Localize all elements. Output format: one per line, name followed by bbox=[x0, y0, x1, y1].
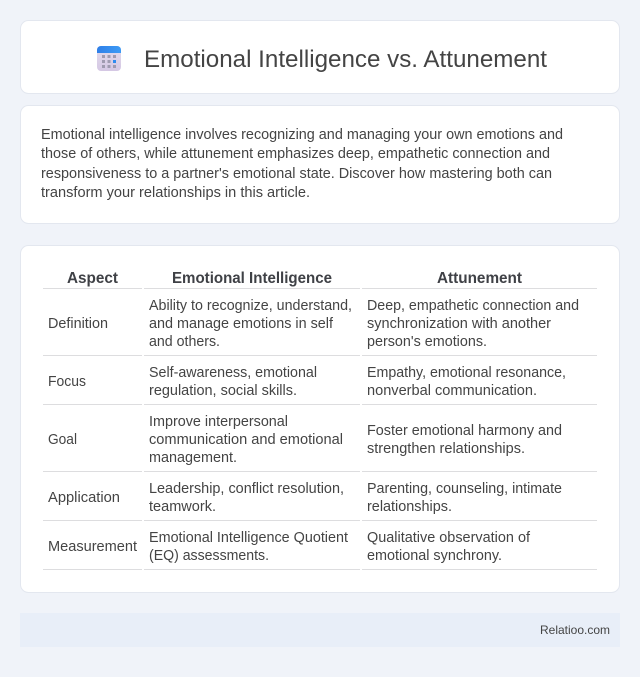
row: goal: management. bbox=[149, 450, 237, 466]
row: goal: Improve interpersonal bbox=[149, 414, 288, 430]
table header row bbox=[67, 270, 522, 287]
row: measurement: emotional synchrony. bbox=[367, 548, 502, 564]
row: definition: and manage emotions in self bbox=[149, 316, 334, 332]
row: focus: Focus bbox=[48, 374, 86, 390]
row: definition: person's emotions. bbox=[367, 334, 487, 350]
row: application: relationships. bbox=[367, 499, 452, 515]
table header row: Emotional Intelligence bbox=[172, 270, 332, 287]
row: focus: regulation, social skills. bbox=[149, 383, 297, 399]
row: application: teamwork. bbox=[149, 499, 216, 515]
row: definition: Ability to recognize, understand, bbox=[149, 298, 352, 314]
intro paragraph: those of others, while attunement emphasizes deep, empathetic connection and bbox=[41, 146, 550, 162]
row: focus: Empathy, emotional resonance, bbox=[367, 365, 566, 381]
row: application bbox=[48, 481, 562, 515]
row: definition: Definition bbox=[48, 316, 108, 332]
footer credit: Relatioo.com bbox=[540, 623, 610, 637]
row: measurement bbox=[48, 530, 531, 564]
row: goal: communication and emotional bbox=[149, 432, 343, 448]
intro paragraph bbox=[41, 127, 563, 201]
row: application: Application bbox=[48, 490, 120, 506]
row: definition bbox=[48, 298, 579, 350]
row: focus bbox=[48, 365, 566, 399]
row: goal: strengthen relationships. bbox=[367, 441, 525, 457]
row: measurement: Measurement bbox=[48, 539, 137, 555]
intro paragraph: transform your relationships in this article. bbox=[41, 185, 310, 201]
row: definition: and others. bbox=[149, 334, 220, 350]
panel: title bbox=[20, 20, 620, 94]
row: goal: Goal bbox=[48, 432, 77, 448]
row: measurement: Emotional Intelligence Quotient bbox=[149, 530, 348, 546]
table header row: Attunement bbox=[437, 270, 522, 287]
icon: calendar bbox=[97, 46, 121, 71]
row: focus: nonverbal communication. bbox=[367, 383, 537, 399]
row: definition: Deep, empathetic connection and bbox=[367, 298, 579, 314]
row: goal: Foster emotional harmony and bbox=[367, 423, 562, 439]
row: application: Parenting, counseling, intimate bbox=[367, 481, 562, 497]
row: measurement: Qualitative observation of bbox=[367, 530, 531, 546]
row: definition: synchronization with another bbox=[367, 316, 551, 332]
row: goal bbox=[48, 414, 562, 466]
intro paragraph: responsiveness to a partner's emotional state. Discover how mastering both can bbox=[41, 166, 552, 182]
footer bar bbox=[20, 613, 620, 647]
intro paragraph: Emotional intelligence involves recognizing and managing your own emotions and bbox=[41, 127, 563, 143]
row: application: Leadership, conflict resolution, bbox=[149, 481, 344, 497]
panel: introduction bbox=[20, 106, 620, 224]
row: focus: Self-awareness, emotional bbox=[149, 365, 317, 381]
panel: comparison table bbox=[20, 246, 620, 592]
row: measurement: (EQ) assessments. bbox=[149, 548, 269, 564]
title text: Emotional Intelligence vs. Attunement bbox=[144, 46, 547, 73]
table header row: Aspect bbox=[67, 270, 118, 287]
